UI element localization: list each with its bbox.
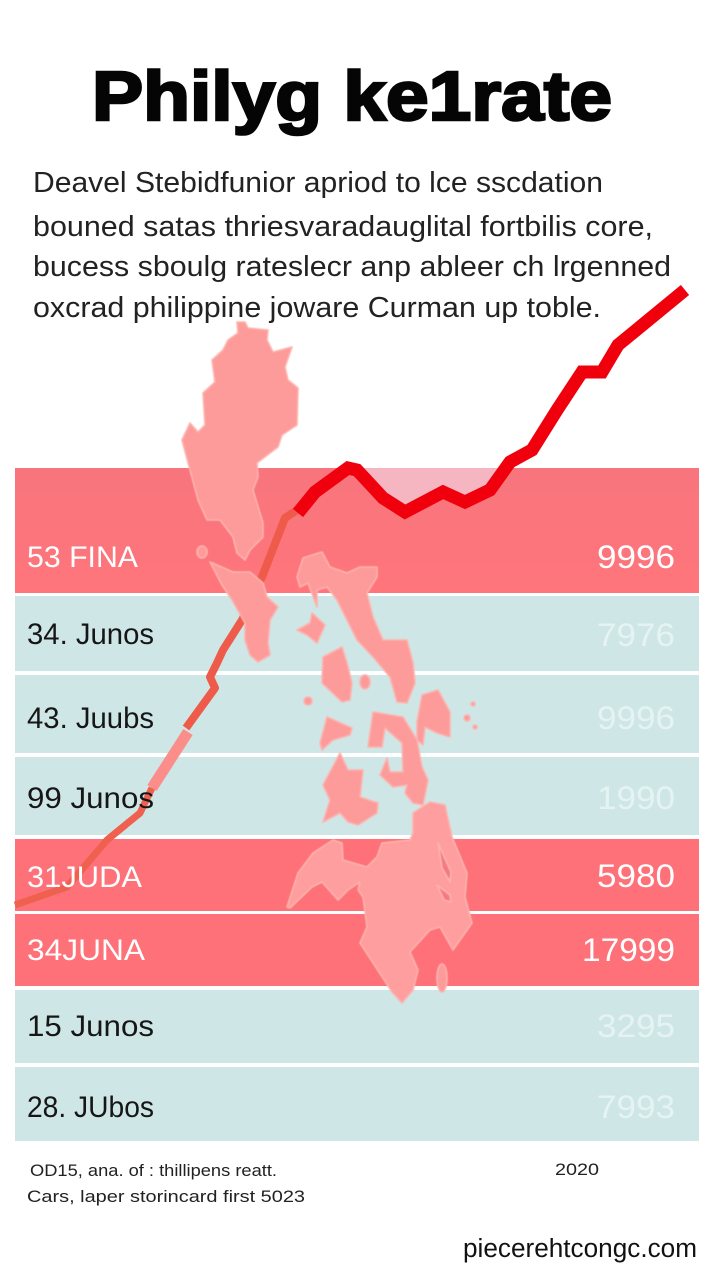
island: eastern arm [297, 552, 415, 703]
footnote: OD15, ana. of : thillipens reatt. [30, 1161, 277, 1180]
row labels [27, 541, 154, 1124]
island: Mindoro [322, 647, 352, 702]
island: southern Luzon [210, 562, 278, 662]
island: small central [297, 613, 325, 643]
label: row 6: 34JUNA [27, 934, 145, 967]
trend line: lower section [15, 508, 300, 905]
value: row 7: 3295 [597, 1008, 675, 1044]
value: row 5: 5980 [597, 858, 675, 894]
island: Negros [323, 753, 378, 825]
map of the Philippines [182, 322, 477, 1003]
value: row 1: 9996 [597, 539, 675, 575]
row values [582, 539, 675, 1125]
label: row 5: 31JUDA [27, 861, 142, 894]
island: south-east islet [437, 964, 447, 992]
label: row 7: 15 Junos [27, 1010, 154, 1043]
value: row 4: 1990 [597, 780, 675, 816]
intro text block: bouned satas thriesvaradauglital fortbilis core, [33, 211, 653, 243]
title: Philyg ke1rate [92, 57, 612, 135]
value: row 3: 9996 [597, 700, 675, 736]
island: Panay [320, 717, 352, 750]
islet: north-west [197, 546, 207, 558]
island: Mindanao [287, 802, 472, 1003]
intro text block: oxcrad philippine joware Curman up toble. [33, 292, 601, 324]
label: row 2: 34. Junos [27, 618, 154, 651]
footnote [27, 1161, 305, 1206]
intro text block: Deavel Stebidfunior apriod to lce sscdation [33, 167, 603, 199]
label: row 4: 99 Junos [27, 782, 154, 815]
intro text block: bucess sboulg rateslecr anp ableer ch lrgenned [33, 251, 671, 283]
value: row 8: 7993 [597, 1089, 675, 1125]
value: row 2: 7976 [597, 617, 675, 653]
table row backgrounds [15, 468, 699, 1141]
label: row 8: 28. JUbos [27, 1091, 154, 1124]
trend line: upper section [298, 290, 685, 513]
shaded area under trend line [357, 468, 510, 512]
island: Samar [417, 690, 450, 745]
island: northern Luzon [182, 322, 298, 560]
label: row 1: 53 FINA [27, 541, 138, 574]
footnote: Cars, laper storincard first 5023 [27, 1187, 305, 1206]
lake: Mindanao [438, 843, 451, 882]
island: Leyte and Cebu [368, 712, 428, 805]
islets: central [360, 675, 370, 689]
source url: piecerehtcongc.com [463, 1235, 697, 1263]
intro text block [33, 167, 671, 324]
value: row 6: 17999 [582, 932, 675, 968]
label: row 3: 43. Juubs [27, 702, 154, 735]
footnote year: 2020 [555, 1160, 599, 1179]
